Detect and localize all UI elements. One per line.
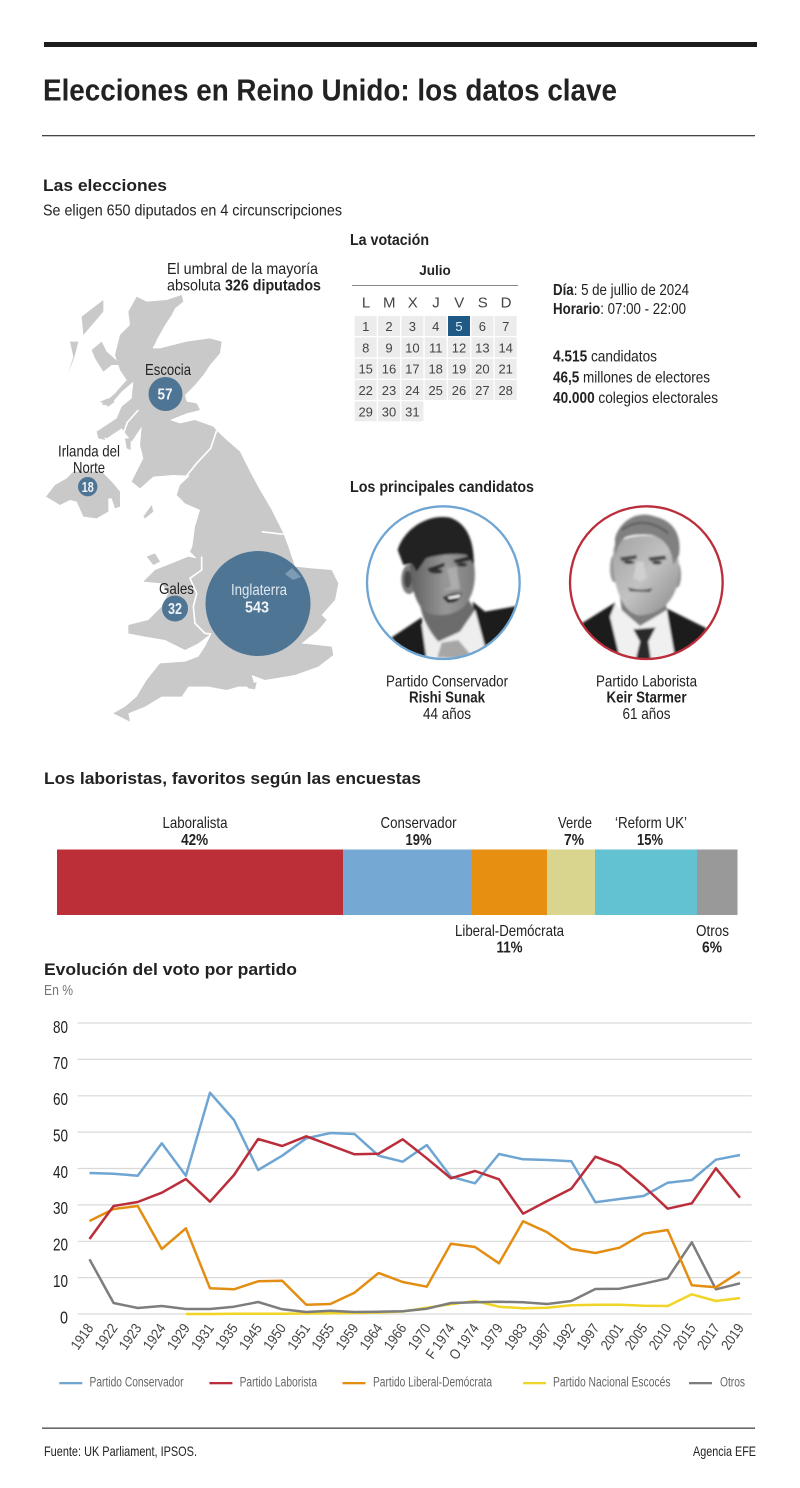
text: key figures: 4.515 candidatos <box>553 348 657 366</box>
stacked bar: voting intention <box>57 850 738 915</box>
series: Partido Laborista <box>90 1136 740 1239</box>
label: Verde: 7% <box>564 832 584 849</box>
x axis labels: 1945 <box>237 1321 266 1353</box>
calendar: July: 6 <box>479 319 486 334</box>
calendar: July: 14 <box>498 340 513 355</box>
label: Otros: 6% <box>702 940 722 956</box>
calendar: July: 19 <box>452 362 466 377</box>
label: Laborista <box>162 815 228 849</box>
x axis labels: 2010 <box>646 1321 675 1353</box>
legend: Partido Conservador <box>90 1374 184 1390</box>
calendar: July <box>352 263 518 421</box>
source: Fuente: UK Parliament, IPSOS. <box>44 1443 197 1459</box>
calendar: July: 18 <box>428 362 443 377</box>
calendar: July: 23 <box>382 383 396 398</box>
x axis labels: 1935 <box>213 1321 242 1353</box>
bubble: Inglaterra: Inglaterra <box>231 582 287 599</box>
label: Conservador: 19% <box>406 832 432 849</box>
bubble: Gales: 32 <box>168 601 182 618</box>
caption: Keir Starmer <box>596 674 697 723</box>
y axis labels: 30 <box>53 1198 68 1218</box>
x axis labels: 1924 <box>140 1321 170 1353</box>
bubble: Escocia: Escocia <box>145 362 191 379</box>
calendar: July: 16 <box>382 362 396 377</box>
x axis labels: 2001 <box>598 1321 627 1353</box>
x axis labels: 1923 <box>116 1321 145 1353</box>
caption: Rishi Sunak <box>386 674 509 723</box>
text: key figures <box>553 348 718 407</box>
y axis labels: 0 <box>60 1308 68 1328</box>
calendar: July: 12 <box>452 340 466 355</box>
label: Reform UK <box>615 815 687 849</box>
caption: Rishi Sunak: 44 años <box>423 706 471 723</box>
y axis labels: 50 <box>53 1126 68 1146</box>
calendar: July: 30 <box>382 404 396 419</box>
subheading: circunscripciones: Se eligen 650 diputados en 4 circunscripciones <box>43 202 342 220</box>
x axis labels: O 1974 <box>447 1321 483 1363</box>
series: Partido Nacional Escocés <box>186 1294 740 1314</box>
series: Otros <box>90 1242 740 1312</box>
calendar: July: 21 <box>498 362 513 377</box>
calendar: July: 28 <box>498 383 513 398</box>
text: majority threshold <box>167 261 321 294</box>
line chart: vote share by party <box>53 1017 752 1363</box>
text: majority threshold: absoluta 326 diputados <box>167 278 321 294</box>
calendar: July: J <box>432 294 440 312</box>
bubble: Inglaterra <box>206 551 310 656</box>
x axis labels: 2005 <box>622 1321 651 1353</box>
calendar: July: 15 <box>358 362 373 377</box>
series: Partido Liberal-Demócrata <box>90 1206 740 1305</box>
x axis labels: 1997 <box>574 1321 603 1353</box>
x axis labels: 1966 <box>381 1321 410 1353</box>
calendar: July: 20 <box>475 362 490 377</box>
caption: Rishi Sunak: Partido Conservador <box>386 674 509 690</box>
y axis labels <box>53 1017 68 1328</box>
calendar: July: 17 <box>405 362 420 377</box>
credit: Agencia EFE <box>693 1443 756 1459</box>
label: Laborista: Laboralista <box>162 815 228 832</box>
text: date and hours: Horario: 07:00 - 22:00 <box>553 301 686 318</box>
x axis labels: 1959 <box>333 1321 362 1353</box>
heading: las elecciones: Las elecciones <box>43 176 167 195</box>
calendar: July: S <box>478 294 488 312</box>
bubble: Escocia <box>145 362 191 411</box>
heading: la votación: La votación <box>350 232 429 249</box>
label: Liberal-Demócrata <box>455 923 564 956</box>
title: Elecciones en Reino Unido: los datos clave <box>43 72 617 108</box>
y axis labels: 60 <box>53 1089 68 1109</box>
calendar: July: 11 <box>429 340 442 355</box>
calendar: July: X <box>408 294 418 312</box>
label: Reform UK: ‘Reform UK’ <box>615 815 687 832</box>
x axis labels: 1992 <box>550 1321 579 1353</box>
bubble: Irlanda del Norte: 18 <box>82 479 94 496</box>
x axis labels: 1931 <box>189 1321 218 1353</box>
bubble: Irlanda del Norte: Irlanda del <box>58 444 120 460</box>
legend <box>59 1374 745 1390</box>
calendar: July: 2 <box>385 319 393 334</box>
calendar: July: 1 <box>362 319 369 334</box>
label: Reform UK: 15% <box>637 832 663 849</box>
x axis labels: F 1974 <box>423 1321 459 1362</box>
portrait: Keir Starmer <box>570 506 723 660</box>
calendar: July: 13 <box>475 340 490 355</box>
series: Partido Conservador <box>90 1093 740 1202</box>
calendar: July: 25 <box>428 383 443 398</box>
x axis labels: 2015 <box>670 1321 700 1353</box>
calendar: July: 4 <box>432 319 439 334</box>
legend: Otros <box>720 1374 745 1390</box>
calendar: July: 22 <box>358 383 373 398</box>
x axis labels: 1922 <box>92 1321 121 1353</box>
y axis labels: 10 <box>53 1271 68 1291</box>
x axis labels: 2017 <box>695 1321 724 1353</box>
label: Liberal-Demócrata: 11% <box>496 940 522 956</box>
calendar: July: 9 <box>385 340 393 355</box>
x axis labels: 2019 <box>719 1321 748 1353</box>
label: Conservador: Conservador <box>380 815 457 832</box>
calendar: July: 7 <box>502 319 509 334</box>
calendar: July: 31 <box>405 404 420 419</box>
label: Laborista: 42% <box>181 832 208 849</box>
calendar: July: 8 <box>362 340 369 355</box>
heading: candidates: Los principales candidatos <box>350 479 534 496</box>
label: Verde: Verde <box>558 815 592 832</box>
x axis labels: 1918 <box>68 1321 97 1353</box>
y axis labels: 20 <box>53 1234 68 1254</box>
calendar: July: D <box>501 294 512 312</box>
label: Otros <box>696 923 729 956</box>
x axis labels: 1951 <box>285 1321 314 1353</box>
caption: Keir Starmer: Partido Laborista <box>596 674 697 690</box>
label: Conservador <box>380 815 457 849</box>
portrait: Rishi Sunak <box>367 506 520 660</box>
bubble: Gales <box>159 581 194 622</box>
panel: map of the United Kingdom <box>46 295 338 722</box>
calendar: July: 10 <box>405 340 420 355</box>
x axis labels: 1964 <box>357 1321 386 1353</box>
calendar: July: 3 <box>409 319 416 334</box>
calendar: July: 27 <box>475 383 490 398</box>
bubble: Escocia: 57 <box>158 386 173 404</box>
label: Liberal-Demócrata: Liberal-Demócrata <box>455 923 564 940</box>
y axis labels: 40 <box>53 1162 68 1182</box>
x axis labels: 1929 <box>165 1321 194 1353</box>
legend: Partido Nacional Escocés <box>553 1374 671 1390</box>
x axis labels: 1983 <box>502 1321 531 1353</box>
text: date and hours: Día: 5 de jullio de 2024 <box>553 282 689 299</box>
calendar: July: L <box>362 294 370 312</box>
x axis labels: 1987 <box>526 1321 555 1353</box>
map shapes <box>46 295 338 722</box>
x axis labels: 1979 <box>478 1321 507 1353</box>
calendar: July: Julio <box>419 263 451 278</box>
calendar: July: M <box>383 294 396 312</box>
calendar: July: 24 <box>405 383 420 398</box>
y axis labels: 70 <box>53 1053 68 1073</box>
text: key figures: 46,5 millones de electores <box>553 370 710 386</box>
calendar: July: 26 <box>452 383 466 398</box>
caption: Keir Starmer: Keir Starmer <box>606 690 686 706</box>
x axis labels <box>68 1321 748 1363</box>
calendar: July: V <box>454 294 464 312</box>
bubble: Inglaterra: 543 <box>245 600 269 616</box>
x axis labels: 1970 <box>405 1321 435 1353</box>
x axis labels: 1955 <box>309 1321 338 1353</box>
y axis labels: 80 <box>53 1017 68 1037</box>
legend: Partido Liberal-Demócrata <box>373 1374 492 1390</box>
heading: polls: Los laboristas, favoritos según las encuestas <box>44 769 421 788</box>
legend: Partido Laborista <box>240 1374 317 1390</box>
caption: Keir Starmer: 61 años <box>622 706 670 723</box>
bubble: Gales: Gales <box>159 581 194 598</box>
text: majority threshold: El umbral de la mayoría <box>167 261 318 278</box>
caption: Rishi Sunak: Rishi Sunak <box>409 690 485 706</box>
heading: vote evolution: Evolución del voto por partido <box>44 960 297 979</box>
x axis labels: 1950 <box>261 1321 290 1353</box>
calendar: July: 5 <box>455 319 463 334</box>
calendar: July: 29 <box>358 404 373 419</box>
bubble: Irlanda del Norte: Norte <box>73 460 105 477</box>
text: key figures: 40.000 colegios electorales <box>553 390 718 407</box>
text: date and hours <box>553 282 689 318</box>
unit label: En % <box>44 983 73 999</box>
label: Otros: Otros <box>696 923 729 940</box>
label: Verde <box>558 815 592 849</box>
bubble: Irlanda del Norte <box>58 444 120 496</box>
